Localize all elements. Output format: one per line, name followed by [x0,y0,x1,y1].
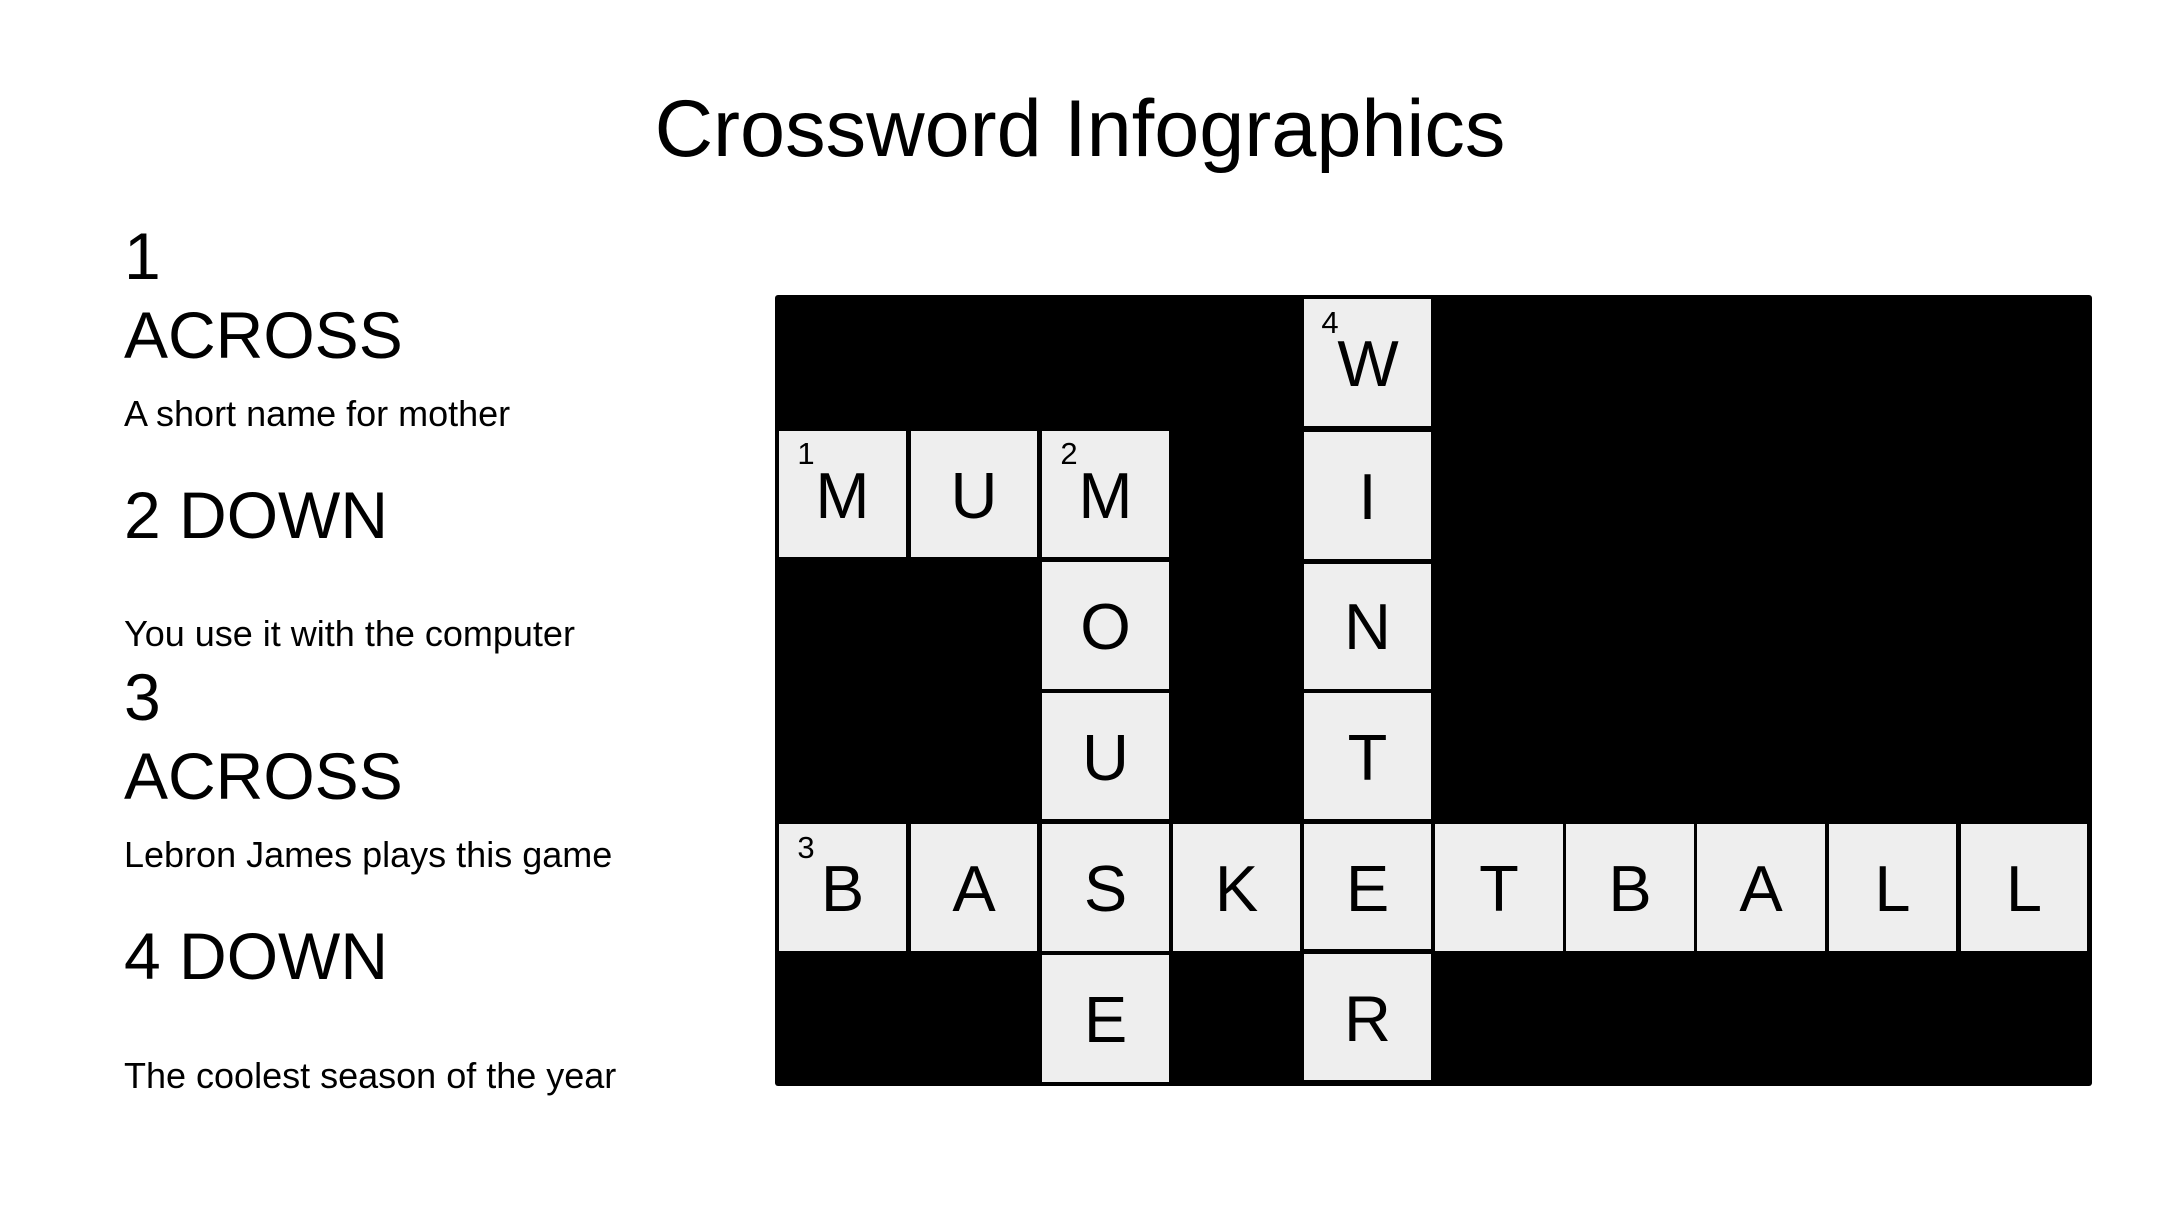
cell: N: N [1344,590,1391,663]
cell: M with number 1 [779,431,906,557]
cell: R: R [1344,982,1391,1055]
cell: S: S [1084,852,1127,925]
cell: E [1304,824,1431,949]
cell: L: L [1874,852,1911,925]
clues panel [124,219,616,1096]
cell: B with number 3: B [821,852,864,925]
cell: U: U [951,459,997,532]
clue 1 text: A short name for mother [124,393,510,434]
cell: T [1304,693,1431,819]
cell: T: T [1479,852,1519,925]
cell: O [1042,562,1169,689]
cell: M with number 2 [1042,431,1169,557]
cell: M with number 1: 1 [797,436,815,471]
clue 1 heading: ACROSS [124,298,403,372]
cell: A [911,824,1037,951]
clue 1 heading: 1 [124,219,161,293]
cell: U [911,431,1037,557]
cell: W with number 4: 4 [1321,305,1339,340]
cell: L [1961,824,2087,951]
title: Crossword Infographics [655,84,1505,174]
cell: O: O [1080,590,1131,663]
cell: U [1042,693,1169,819]
cell: M with number 2: M [1078,459,1133,532]
cell: B: B [1608,852,1652,925]
cell: U: U [1082,721,1129,794]
cell: B with number 3 [779,824,906,951]
clue 2 text: You use it with the computer [124,613,575,654]
cell: N [1304,564,1431,689]
cell: A: A [952,852,996,925]
cell: E: E [1084,983,1127,1056]
clue 3 heading: ACROSS [124,739,403,813]
cell: A [1697,824,1825,951]
cell: M with number 2: 2 [1060,436,1078,471]
cell: E: E [1346,852,1389,925]
clue 4 text: The coolest season of the year [124,1055,616,1096]
cell: B with number 3: 3 [797,830,815,865]
cell: M with number 1: M [815,459,870,532]
crossword board [775,295,2092,1086]
clue 2 heading: 2 DOWN [124,478,388,552]
cell: S [1042,824,1169,951]
cell: B [1566,824,1694,951]
cell: W with number 4: W [1337,327,1399,400]
cell: K: K [1215,852,1258,925]
cell: L: L [2006,852,2042,925]
board background [775,295,2092,1086]
clue 4 heading: 4 DOWN [124,919,388,993]
cell: E [1042,955,1169,1082]
cell: L [1829,824,1956,951]
cell: K [1173,824,1300,951]
cell: W with number 4 [1304,299,1431,426]
cell: I [1304,432,1431,559]
cell: R [1304,954,1431,1080]
cell: T: T [1348,721,1387,794]
cell: T [1435,824,1563,951]
clue 3 heading: 3 [124,660,161,734]
cell: A: A [1739,852,1783,925]
cell: I: I [1358,460,1377,533]
clue 3 text: Lebron James plays this game [124,834,612,875]
